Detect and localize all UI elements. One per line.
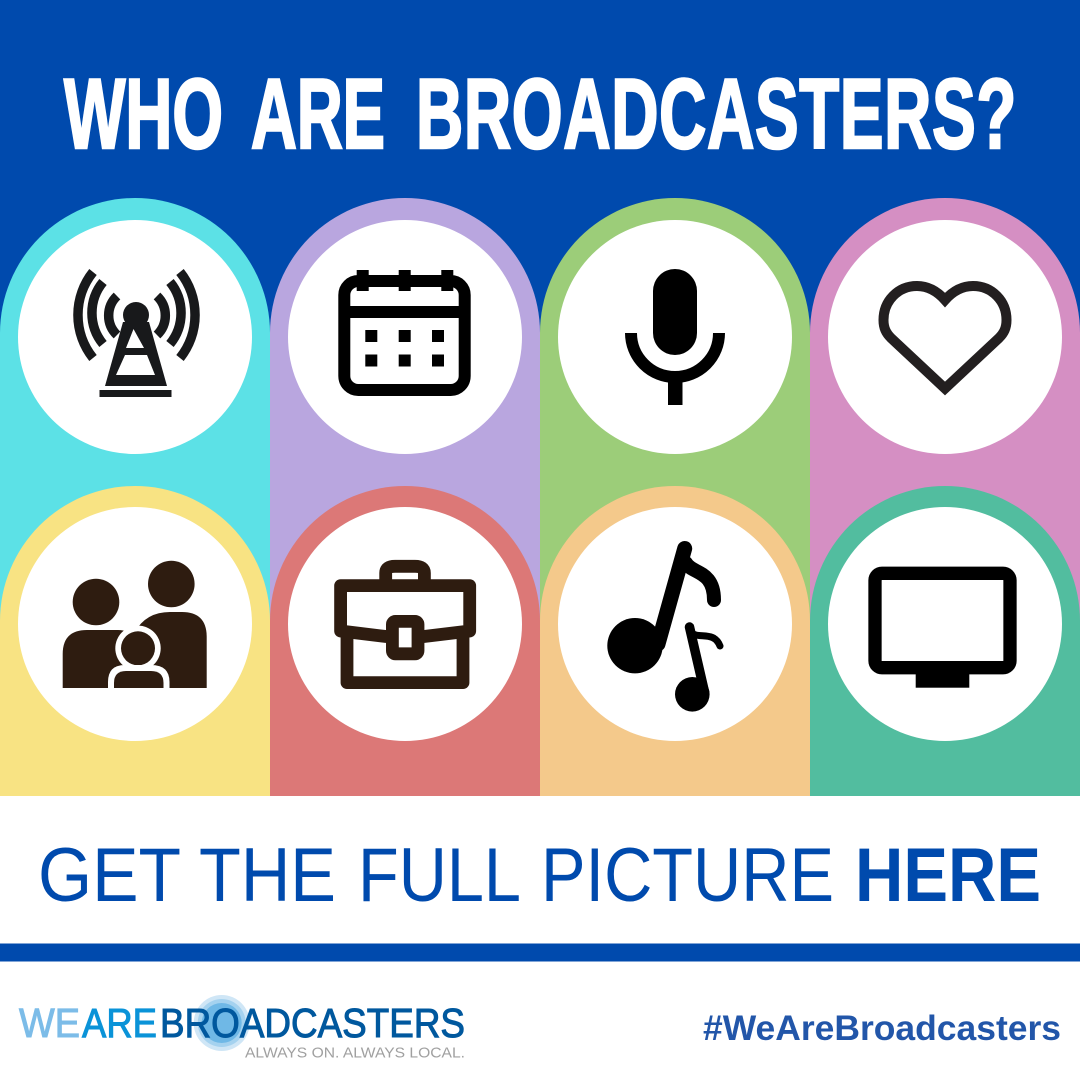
logo: We Are Broadcasters: WE <box>19 1000 80 1046</box>
panel: pink arch <box>810 198 1080 800</box>
icon: heart <box>828 220 1062 454</box>
panel: teal arch <box>810 486 1080 796</box>
icon: briefcase <box>288 507 522 741</box>
logo: We Are Broadcasters: ALWAYS ON. ALWAYS LOCAL. <box>245 1044 465 1062</box>
panel: purple arch <box>270 198 540 800</box>
logo: We Are Broadcasters: ARE <box>82 1000 157 1046</box>
icon: music notes <box>558 507 792 741</box>
panel: orange arch <box>540 486 810 796</box>
call to action: PICTURE <box>541 833 834 918</box>
icon: family <box>18 507 252 741</box>
call to action: THE <box>199 833 336 918</box>
logo: We Are Broadcasters: BROADCASTERS <box>160 1000 465 1046</box>
top blue background <box>0 0 1080 800</box>
title <box>64 58 1017 169</box>
call to action: HERE <box>855 833 1041 918</box>
title: WHO <box>64 58 223 169</box>
call to action: GET <box>38 833 181 918</box>
call to action <box>38 833 1041 918</box>
icon: television <box>828 507 1062 741</box>
title: ARE <box>251 58 385 169</box>
panel: green arch <box>540 198 810 800</box>
white lower panel <box>0 796 1080 1080</box>
blue divider band <box>0 944 1080 962</box>
call to action: FULL <box>358 833 521 918</box>
panel: cyan arch <box>0 198 270 800</box>
hashtag: #WeAreBroadcasters <box>703 1009 1061 1048</box>
icon: broadcast tower <box>18 220 252 454</box>
icon: calendar <box>288 220 522 454</box>
logo: We Are Broadcasters <box>19 995 465 1062</box>
icon: microphone <box>558 220 792 454</box>
panel: red arch <box>270 486 540 796</box>
panel: yellow arch <box>0 486 270 796</box>
